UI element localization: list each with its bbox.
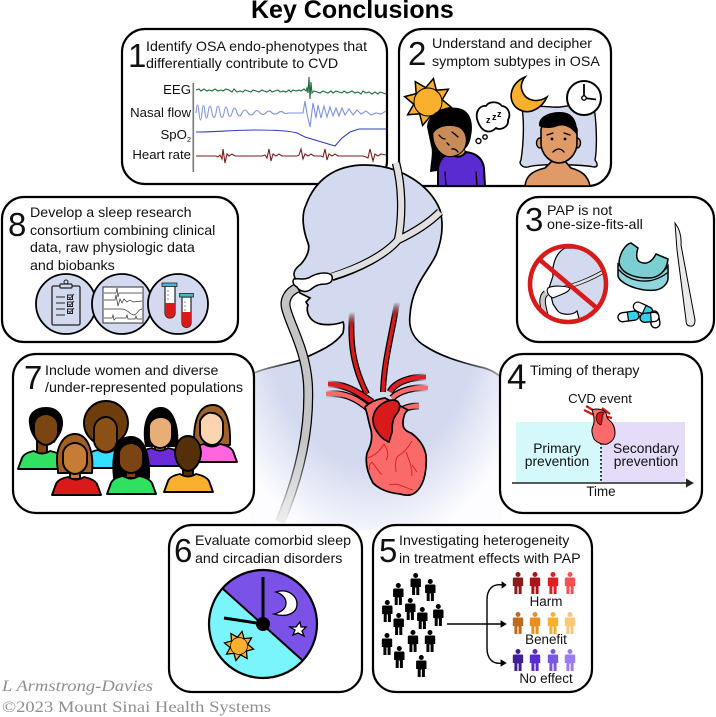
number 5: 5 (379, 532, 397, 569)
central figure: head and torso with CPAP (250, 163, 503, 530)
signal labels: EEG (163, 82, 191, 97)
icon: moon (274, 591, 297, 615)
heading 1: differentially contribute to CVD (146, 56, 338, 72)
heading 3: one-size-fits-all (547, 217, 643, 233)
axis line (192, 83, 194, 172)
panel 8: sleep research consortium (2, 197, 238, 342)
person: red shirt (52, 434, 101, 495)
heading 8: consortium combining clinical (30, 223, 215, 239)
panel 4: timing of therapy (500, 354, 702, 513)
primary prevention block: Primary (533, 441, 581, 456)
icon: star (290, 622, 306, 636)
credit: copyright: ©2023 Mount Sinai Health Systems (2, 699, 271, 716)
number 3: 3 (525, 201, 543, 238)
secondary prevention block (601, 422, 685, 482)
panel 2: symptom subtypes (399, 29, 611, 186)
signal labels: SpO (160, 127, 187, 142)
coronary vessels (367, 441, 417, 490)
heading 8: Develop a sleep research (30, 205, 192, 221)
EEG trace (196, 77, 386, 99)
person: cyan shirt (82, 401, 131, 468)
icon: clipboard (36, 274, 96, 334)
heading 3: PAP is not (547, 203, 612, 219)
population crowd (382, 573, 443, 677)
label: time: Time (586, 484, 616, 499)
panel 6: comorbid sleep and circadian disorders (169, 525, 362, 692)
icon: pillow (520, 105, 597, 167)
icon: sleepy woman (427, 108, 485, 186)
heading 8: and biobanks (30, 258, 115, 274)
heading 5: in treatment effects with PAP (399, 551, 581, 567)
heart rate trace (196, 149, 386, 163)
benefit group (513, 612, 575, 647)
number 7: 7 (24, 359, 42, 396)
icon: pills (617, 301, 661, 329)
secondary prevention block: Secondary (613, 441, 679, 456)
time axis arrow (512, 478, 694, 488)
icon: clock (567, 81, 601, 115)
heading 6: and circadian disorders (195, 551, 342, 567)
heading 6: Evaluate comorbid sleep (195, 533, 351, 549)
icon: no PAP sign (530, 246, 610, 325)
signal labels: Heart rate (132, 147, 191, 162)
icon: sun (221, 628, 257, 664)
heading 7: /under-represented populations (45, 380, 243, 396)
person: green shirt back (18, 408, 67, 469)
branching arrows (447, 582, 506, 666)
panel 1: OSA endo-phenotypes (122, 29, 387, 184)
icon: polysomnography (92, 274, 152, 334)
number 1: 1 (128, 37, 146, 74)
heart (326, 377, 428, 495)
icon: thought bubble with zzz: z (492, 112, 497, 122)
clock hands (224, 577, 263, 624)
air hose (280, 288, 308, 522)
signal labels (130, 82, 191, 162)
icon: thought bubble with zzz (476, 102, 509, 144)
clock chart (208, 568, 318, 680)
icon: test tubes (148, 274, 208, 334)
harm group (513, 572, 575, 609)
body outline (250, 165, 503, 379)
heading 5: Investigating heterogeneity (399, 533, 569, 549)
primary prevention block: prevention (525, 454, 589, 469)
heading 2: Understand and decipher (432, 36, 592, 52)
nasal mask (293, 273, 332, 291)
label: CVD event: CVD event (568, 391, 632, 406)
heading 4: Timing of therapy (530, 363, 640, 379)
number 8: 8 (8, 206, 26, 243)
number 2: 2 (408, 35, 426, 72)
signal labels: Nasal flow (130, 105, 191, 120)
icon: scalpel (675, 223, 695, 326)
signal labels: 2 (187, 135, 191, 144)
icon: sun (399, 73, 457, 131)
benefit group: Benefit (525, 632, 567, 647)
icon: worried man (525, 112, 590, 186)
headgear straps (330, 163, 440, 277)
icon: small heart (584, 406, 615, 444)
heading 8: data, raw physiologic data (30, 240, 195, 256)
great vessels (326, 377, 428, 412)
carotid arteries (351, 302, 397, 394)
panel 3: PAP not one-size-fits-all (517, 197, 714, 342)
event marker (600, 443, 602, 482)
no effect group: No effect (519, 671, 573, 686)
person: orange shirt (164, 436, 213, 492)
aorta (373, 400, 400, 442)
heading 1: Identify OSA endo-phenotypes that (146, 39, 367, 55)
no effect group (513, 649, 575, 686)
panel 7: women and under-represented populations (13, 354, 254, 513)
SpO2 trace (196, 129, 386, 146)
torso and head fill (250, 165, 503, 530)
icon: thought bubble with zzz: z (486, 115, 491, 125)
number 4: 4 (507, 358, 526, 397)
icon: thought bubble with zzz: z (497, 109, 502, 119)
heading 7: Include women and diverse (45, 363, 218, 379)
harm group: Harm (530, 594, 562, 609)
nasal flow trace (196, 101, 386, 127)
person: purple shirt (136, 408, 185, 466)
number 6: 6 (174, 532, 192, 569)
person: green shirt front (107, 437, 156, 494)
heart body (365, 398, 426, 495)
secondary prevention block: prevention (614, 454, 678, 469)
icon: moon (511, 77, 547, 112)
panel 5: heterogeneity in treatment effects (373, 525, 592, 692)
credit: artist: L Armstrong-Davies (1, 678, 153, 695)
icon: mouthguard (618, 243, 668, 290)
heading 2: symptom subtypes in OSA (432, 54, 600, 70)
primary prevention block (516, 422, 601, 482)
person: pink shirt (188, 405, 237, 462)
